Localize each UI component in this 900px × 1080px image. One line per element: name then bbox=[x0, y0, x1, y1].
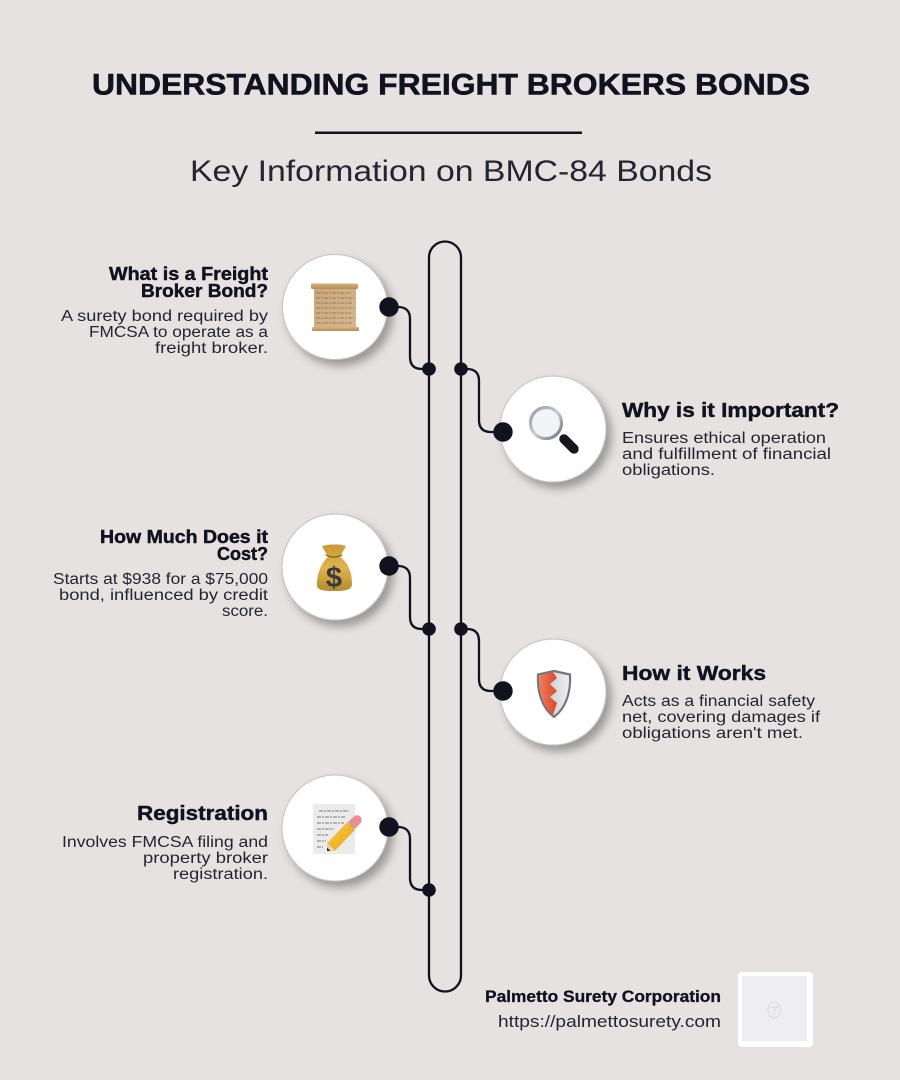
panel: registration bbox=[62, 775, 399, 883]
heading: cost: How Much Does it bbox=[100, 527, 268, 547]
text: how it works description bbox=[622, 693, 821, 742]
text: registration description: Involves FMCSA filing and bbox=[62, 834, 268, 851]
icon: money bag: $ bbox=[326, 562, 342, 594]
heading: registration: Registration bbox=[137, 802, 268, 825]
icon disc: scroll bbox=[282, 254, 399, 360]
text: bond description: A surety bond required by bbox=[61, 308, 268, 325]
text: cost description: bond, influenced by credit bbox=[59, 587, 269, 604]
subtitle: Key Information on BMC-84 Bonds bbox=[190, 155, 712, 188]
icon disc: money bag bbox=[282, 514, 399, 620]
footer: company details: Palmetto Surety Corporation bbox=[485, 988, 721, 1006]
text: importance description: and fulfillment of financial bbox=[622, 446, 831, 463]
text: registration description: registration. bbox=[173, 866, 268, 883]
heading: why important: Why is it Important? bbox=[622, 399, 839, 422]
heading: how it works: How it Works bbox=[622, 662, 766, 685]
panel: how it works bbox=[493, 639, 821, 745]
panel: what is a freight broker bond bbox=[61, 254, 399, 360]
text: how it works description: obligations aren't met. bbox=[622, 725, 803, 742]
title: UNDERSTANDING FREIGHT BROKERS BONDS bbox=[92, 68, 810, 102]
text: registration description: property broker bbox=[143, 850, 268, 867]
heading: what is a bond: What is a Freight bbox=[109, 264, 268, 284]
text: cost description bbox=[53, 571, 269, 620]
icon disc: memo and pencil bbox=[282, 775, 399, 881]
icon: memo with pencil bbox=[313, 804, 357, 854]
heading: cost bbox=[100, 527, 268, 564]
connector: registration bbox=[389, 827, 436, 897]
text: bond description bbox=[61, 308, 268, 357]
icon: magnifying glass bbox=[530, 408, 574, 449]
panel: how much does it cost bbox=[53, 514, 399, 620]
panel: why is it important bbox=[493, 376, 839, 482]
heading: cost: Cost? bbox=[217, 544, 268, 564]
connector: how it works bbox=[454, 622, 503, 691]
footer: logo placeholder bbox=[738, 972, 813, 1047]
text: cost description: score. bbox=[222, 603, 268, 620]
icon disc: magnifier bbox=[493, 376, 606, 482]
connector: importance bbox=[454, 362, 503, 432]
text: how it works description: net, covering damages if bbox=[622, 709, 821, 726]
text: bond description: FMCSA to operate as a bbox=[89, 324, 268, 341]
connector: bond definition bbox=[389, 307, 436, 376]
text: bond description: freight broker. bbox=[155, 340, 268, 357]
heading: what is a bond bbox=[109, 264, 268, 301]
footer: company details: https://palmettosurety.com bbox=[498, 1013, 721, 1031]
icon disc: shield bbox=[493, 639, 606, 745]
text: importance description: Ensures ethical operation bbox=[622, 430, 826, 447]
footer: company details bbox=[485, 988, 721, 1031]
text: how it works description: Acts as a financial safety bbox=[622, 693, 815, 710]
icon: scroll bbox=[311, 284, 359, 331]
central timeline track bbox=[429, 242, 461, 992]
icon: shield bbox=[538, 671, 570, 717]
text: importance description bbox=[622, 430, 831, 479]
text: registration description bbox=[62, 834, 268, 883]
text: importance description: obligations. bbox=[622, 462, 715, 479]
text: cost description: Starts at $938 for a $75,000 bbox=[53, 571, 268, 588]
title divider bbox=[315, 132, 582, 134]
heading: what is a bond: Broker Bond? bbox=[141, 281, 268, 301]
connector: cost bbox=[389, 566, 436, 636]
